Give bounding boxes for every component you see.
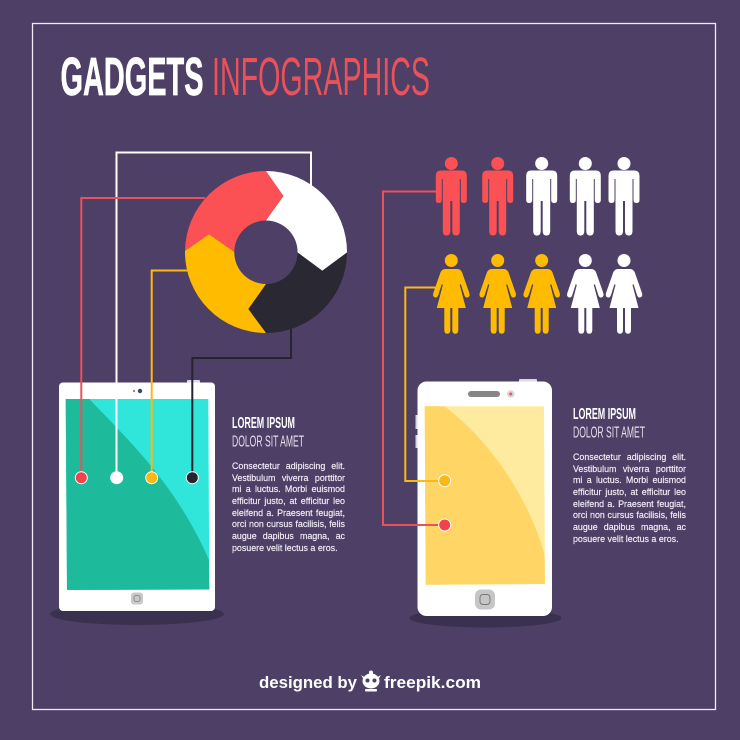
text block: phone description: posuere velit lectus a eros. xyxy=(573,534,679,544)
phone device xyxy=(416,379,552,616)
text block: tablet description: posuere velit lectus a eros. xyxy=(232,543,338,553)
text block: phone description: Vestibulum viverra porttitor xyxy=(573,464,686,474)
text block: phone description: Consectetur adipiscing elit. xyxy=(573,452,686,462)
text block: tablet description: orci non cursus facilisis, felis xyxy=(232,519,345,529)
text block: tablet description: mi a luctus. Morbi euismod xyxy=(232,484,345,494)
heading: tablet text: DOLOR SIT AMET xyxy=(232,434,304,450)
text block: tablet description: eleifend a. Praesent feugiat, xyxy=(232,508,345,518)
title: INFOGRAPHICS xyxy=(212,47,430,107)
heading: phone text: DOLOR SIT AMET xyxy=(573,424,645,442)
segment: yellow xyxy=(185,234,266,333)
connector lines: people to phone xyxy=(383,192,445,525)
text block: phone description: eleifend a. Praesent feugiat, xyxy=(573,499,686,509)
heading: tablet text xyxy=(232,415,304,450)
shadow: phone xyxy=(410,608,562,628)
icon: freepik mascot xyxy=(361,670,381,692)
heading: phone text xyxy=(573,406,645,442)
heading: tablet text: LOREM IPSUM xyxy=(232,415,295,432)
text block: phone description: orci non cursus facilisis, felis xyxy=(573,510,686,520)
segment: white xyxy=(266,171,347,271)
text block: phone description xyxy=(573,452,686,544)
text block: tablet description: augue dapibus magna, ac xyxy=(232,531,345,541)
title: GADGETS xyxy=(60,47,204,107)
footer credit: freepik.com xyxy=(384,674,481,692)
text block: tablet description: efficitur justo, at efficitur leo xyxy=(232,496,345,506)
connector lines: donut to tablet xyxy=(81,152,311,478)
segment: dark xyxy=(248,252,347,333)
segment: red xyxy=(185,171,284,252)
text block: phone description: augue dapibus magna, ac xyxy=(573,522,686,532)
women pictogram row xyxy=(433,254,642,334)
footer credit: designed by xyxy=(259,674,358,692)
text block: phone description: mi a luctus. Morbi euismod xyxy=(573,475,686,485)
men pictogram row xyxy=(436,157,640,236)
text block: tablet description: Consectetur adipiscing elit. xyxy=(232,461,345,471)
text block: phone description: efficitur justo, at efficitur leo xyxy=(573,487,686,497)
shadow: tablet xyxy=(50,603,224,625)
text block: tablet description xyxy=(232,461,345,554)
phone markers xyxy=(439,475,451,531)
heading: phone text: LOREM IPSUM xyxy=(573,406,636,423)
donut chart xyxy=(185,171,347,333)
tablet device xyxy=(59,380,215,611)
text block: tablet description: Vestibulum viverra porttitor xyxy=(232,473,345,483)
footer credit xyxy=(259,670,481,692)
tablet markers xyxy=(75,472,198,484)
